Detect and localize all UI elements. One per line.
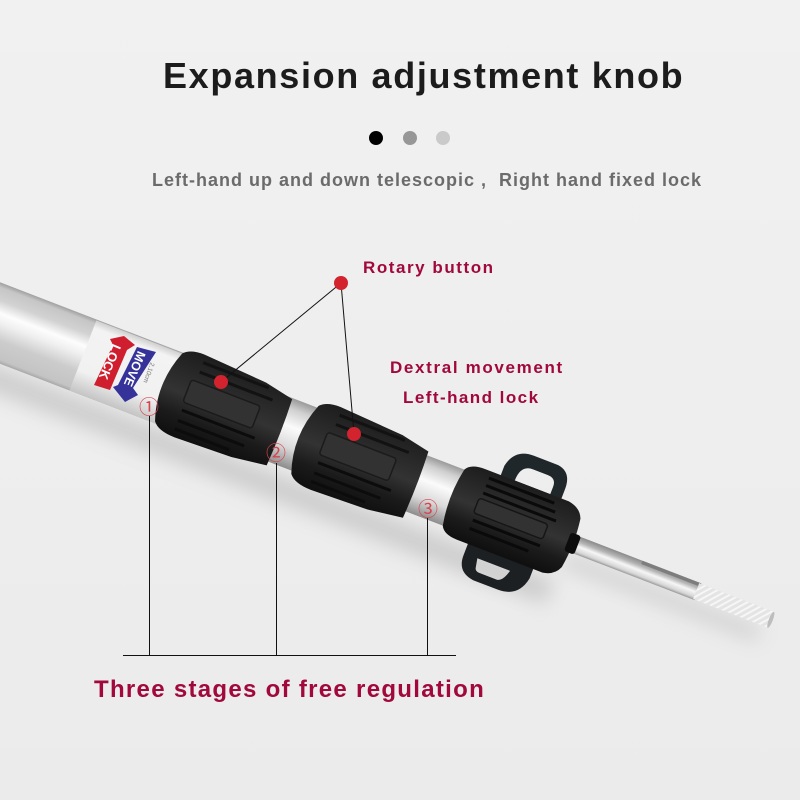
stage marker 3: ③ xyxy=(418,493,438,522)
title: Expansion adjustment knob xyxy=(163,55,684,96)
stage marker 1: ① xyxy=(139,391,159,420)
blue MOVE arrow xyxy=(113,347,156,402)
pagination dots xyxy=(369,131,450,145)
tube length text: 2.10cm xyxy=(141,361,155,384)
lower mounting lug xyxy=(456,536,536,599)
telescopic pole product photo xyxy=(0,245,797,686)
silver section three xyxy=(400,453,470,528)
stage marker 2: ② xyxy=(266,437,286,466)
knob two xyxy=(283,397,433,525)
MOVE and LOCK arrow sticker xyxy=(94,336,156,402)
MOVE text: MOVE xyxy=(121,349,148,388)
callout: movement and lock xyxy=(390,358,564,407)
callout: movement and lock: Dextral movement xyxy=(390,358,564,377)
white label band xyxy=(69,320,186,425)
knob one xyxy=(146,344,297,472)
end rod xyxy=(568,535,776,629)
caption: three stages: Three stages of free regulation xyxy=(94,676,485,703)
stage bracket lines xyxy=(123,416,456,656)
callout: rotary button xyxy=(214,258,495,441)
red LOCK arrow xyxy=(94,336,135,390)
callout: movement and lock: Left-hand lock xyxy=(403,388,539,407)
callout: rotary button: Rotary button xyxy=(363,258,495,277)
subtitle: Left-hand up and down telescopic , Right hand fixed lock xyxy=(152,170,702,190)
upper mounting lug xyxy=(498,447,572,506)
tube shadow xyxy=(0,323,761,679)
silver section two xyxy=(259,395,322,473)
knob three xyxy=(437,461,591,581)
main aluminium tube xyxy=(0,273,186,425)
LOCK text: LOCK xyxy=(96,342,124,382)
